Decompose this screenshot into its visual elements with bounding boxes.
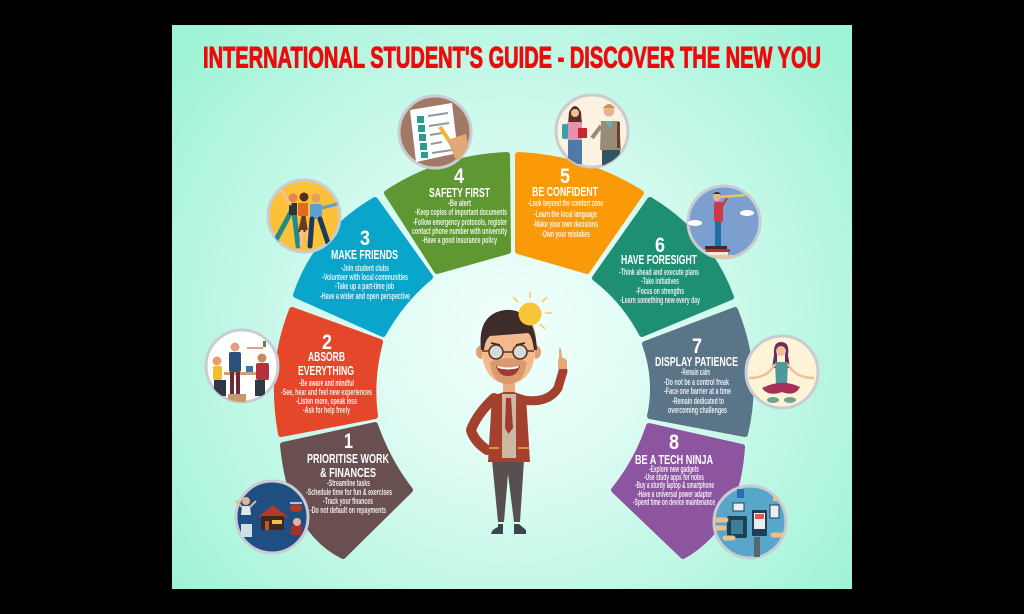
panel: 8 be a tech ninja	[614, 426, 786, 558]
list: -Be alert	[448, 198, 471, 208]
list: -Have a good insurance policy	[422, 235, 497, 245]
background panel	[172, 25, 852, 589]
mouth	[496, 365, 520, 376]
segment shape	[614, 426, 742, 556]
list: -Ask for help freely	[303, 405, 350, 415]
list	[281, 378, 372, 415]
segment shape	[387, 155, 508, 271]
central character	[471, 292, 567, 534]
heading: DISPLAY PATIENCE	[655, 355, 738, 369]
segment shape	[296, 200, 430, 334]
list	[320, 263, 410, 301]
heading: BE A TECH NINJA	[635, 453, 713, 467]
list: -Make your own decisions	[533, 219, 598, 229]
list: -Explore new gadgets	[649, 464, 699, 474]
list: -Listen more, speak less	[296, 396, 357, 406]
list: -Learn something new every day	[620, 295, 700, 305]
panel: 7 display patience	[645, 310, 818, 434]
list: -Volunteer with local communities	[322, 272, 408, 282]
list: -Remain dedicated to	[672, 396, 724, 406]
bulb	[518, 302, 542, 326]
beard shade	[490, 358, 527, 384]
heading: PRIORITISE WORK	[307, 452, 389, 466]
heading: BE CONFIDENT	[532, 185, 598, 199]
icon: light bulb rays	[513, 292, 552, 329]
list: -Remain calm	[681, 367, 710, 377]
list: -Join student clubs	[341, 263, 389, 273]
segment shape	[283, 425, 410, 556]
list: -Take initiatives	[641, 276, 679, 286]
list: -Look beyond the comfort zone	[528, 198, 603, 208]
icon: hands with devices	[714, 486, 786, 558]
list: -Focus on strengths	[636, 286, 684, 296]
number: 5	[560, 165, 570, 188]
list: -Own your mistakes	[541, 229, 590, 239]
list: -Be aware and mindful	[299, 378, 354, 388]
heading: & FINANCES	[320, 466, 376, 480]
list: -Streamline tasks	[327, 478, 370, 488]
heading	[298, 350, 354, 378]
number: 7	[692, 335, 702, 358]
icon: checklist	[399, 96, 471, 168]
number: 1	[344, 430, 353, 453]
panel: 6 have foresight	[595, 186, 760, 334]
number: 2	[322, 331, 332, 354]
list: overcoming challenges	[668, 405, 727, 415]
list: contact phone number with university	[412, 226, 507, 236]
icon: student and teacher	[556, 95, 628, 167]
number: 8	[669, 431, 679, 454]
left arm	[471, 398, 494, 450]
jacket	[488, 392, 530, 462]
face	[481, 312, 536, 384]
list: -Think ahead and execute plans	[619, 267, 699, 277]
list	[528, 198, 603, 239]
hair	[480, 310, 537, 350]
segment shape	[595, 200, 731, 334]
panel: 4 safety first	[387, 96, 508, 271]
list: -Take up a part-time job	[335, 281, 394, 291]
list	[619, 267, 700, 305]
segment shape	[645, 310, 751, 434]
list: -Learn the local language	[534, 209, 597, 219]
icon: three friends	[268, 180, 340, 252]
shirt	[502, 394, 516, 458]
tie	[505, 398, 513, 434]
list: -Have a universal power adapter	[637, 489, 712, 499]
segment shape	[277, 310, 380, 434]
heading: SAFETY FIRST	[429, 186, 490, 200]
panel: 1 prioritise work and finances	[236, 425, 410, 556]
list: -Use study apps for notes	[644, 472, 704, 482]
list: -Track your finances	[323, 496, 373, 506]
trousers	[492, 460, 524, 522]
icon: person with telescope on books	[688, 186, 760, 259]
heading: HAVE FORESIGHT	[621, 253, 697, 267]
list: -Do not be a control freak	[664, 377, 729, 387]
list: -See, hear and feel new experiences	[281, 387, 372, 397]
list	[412, 198, 507, 245]
infographic canvas	[172, 25, 852, 589]
panel: 3 make friends	[268, 180, 430, 334]
eyebrows	[491, 343, 525, 345]
list	[633, 464, 715, 507]
list: -Do not default on repayments	[310, 505, 386, 515]
list: -Spend time on device maintenance	[633, 497, 715, 507]
list: -Buy a sturdy laptop & smartphone	[635, 480, 714, 490]
list: -Keep copies of important documents	[415, 207, 507, 217]
shoes	[491, 524, 526, 534]
heading	[307, 452, 389, 480]
heading: ABSORB	[308, 350, 345, 364]
neck	[503, 378, 515, 398]
number: 6	[655, 234, 665, 257]
list: -Have a wider and open perspective	[320, 291, 410, 301]
icon: house and finances	[236, 481, 308, 553]
panel: 5 be confident	[518, 95, 641, 271]
raised arm	[522, 371, 563, 401]
heading: EVERYTHING	[298, 364, 354, 378]
icon: group meeting	[206, 330, 278, 402]
heading: MAKE FRIENDS	[331, 248, 398, 262]
list: -Follow emergency protocols, register	[413, 217, 507, 227]
glasses	[482, 345, 534, 359]
list: -Schedule time for fun & exercises	[306, 487, 392, 497]
pockets	[489, 447, 529, 449]
list: -Face one barrier at a time	[664, 386, 731, 396]
pointing hand	[558, 348, 567, 369]
ears	[476, 345, 541, 359]
icon: meditating woman	[746, 336, 818, 408]
list	[664, 367, 731, 415]
panel: 2 absorb everything	[206, 310, 380, 434]
list	[306, 478, 392, 515]
segment shape	[518, 155, 641, 271]
number: 3	[360, 227, 370, 250]
number: 4	[454, 165, 464, 188]
